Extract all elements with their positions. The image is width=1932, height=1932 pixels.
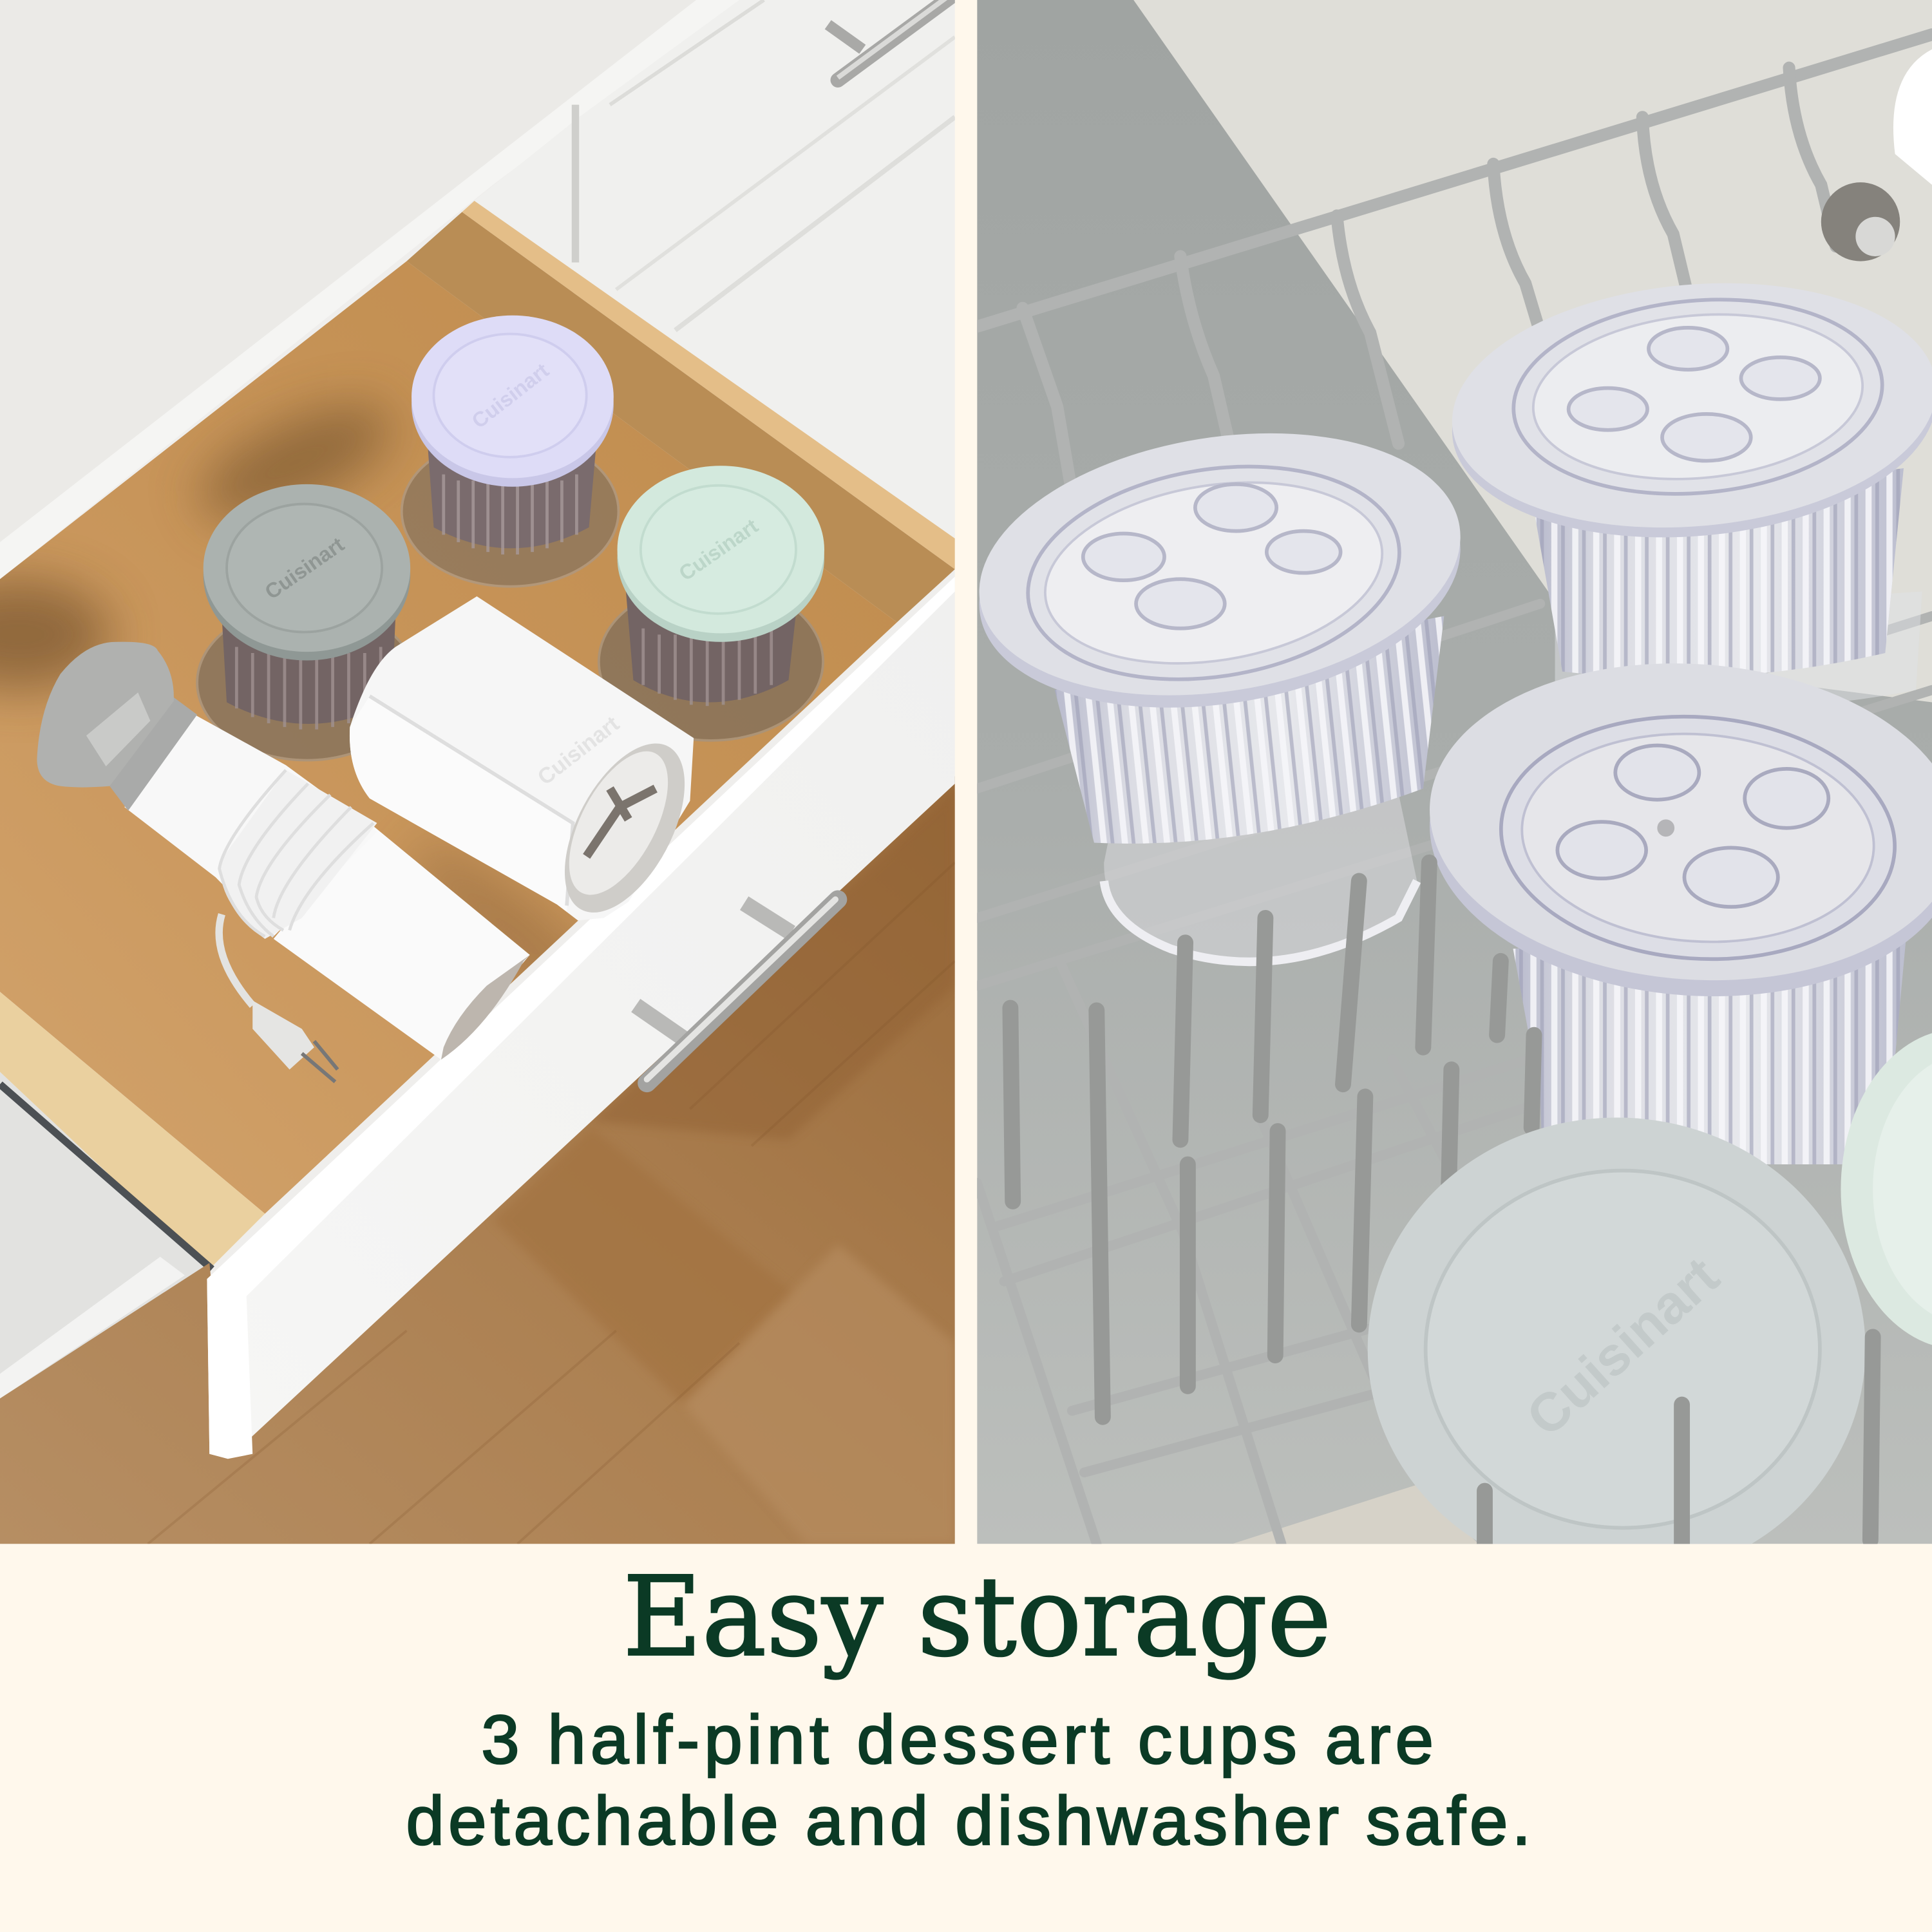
body text: [406, 1701, 1531, 1859]
clear cup front: [1419, 646, 1932, 1164]
front rack pegs: [1010, 862, 1534, 1417]
drawer near side wall: [0, 992, 265, 1269]
gray lid: [1368, 1117, 1866, 1581]
gray cup: Cuisinart: [261, 533, 348, 604]
panel: dishwasher rack photo: [960, 0, 1932, 1581]
clear cup upper right: [1442, 264, 1932, 708]
rack roller: [1821, 182, 1900, 261]
upper sleeve: [124, 715, 377, 936]
body line 2: detachable and dishwasher safe.: [406, 1782, 1531, 1859]
back rack wires: [977, 35, 1932, 493]
lavender cup: Cuisinart: [468, 359, 553, 433]
middle rack wires: [977, 604, 1932, 1544]
upper cabinet doors: [475, 0, 955, 542]
drawer shadows: [0, 382, 643, 1050]
immersion blender with cord: [37, 642, 530, 1082]
lower cabinet and runner: [0, 1072, 212, 1399]
background tub wall: [1133, 0, 1932, 703]
white mug edge: [1893, 50, 1932, 185]
drawer right side wall: [406, 212, 955, 622]
mint lid edge: [1841, 1029, 1932, 1349]
countertop: [0, 0, 696, 542]
wood floor: [0, 776, 955, 1544]
cord coil: [220, 770, 377, 939]
counter edge: [0, 0, 739, 579]
lavender cup: [402, 316, 618, 587]
gray lid: Cuisinart: [1515, 1245, 1730, 1448]
gray cup: [197, 484, 417, 760]
drawer floor: [0, 261, 897, 1214]
panel: drawer storage photo: [0, 0, 955, 1544]
head: [37, 642, 174, 788]
clear foot ring: [1104, 764, 1417, 965]
grey collar: [109, 697, 197, 811]
drawer handle: [636, 900, 838, 1083]
power cord and plug: [219, 914, 252, 1005]
pegs over lid: [1484, 1337, 1873, 1553]
cabinet handle: [828, 0, 955, 80]
wrapped blender cup with blade: [350, 596, 710, 932]
green cup: Cuisinart: [675, 514, 762, 585]
wrapped blender cup with blade: Cuisinart: [533, 712, 624, 790]
drawer front: [207, 576, 955, 1459]
heading: Easy storage: [623, 1554, 1331, 1681]
body line 1: 3 half-pint dessert cups are: [481, 1701, 1434, 1778]
green cup: [599, 466, 824, 741]
lower housing: [274, 823, 530, 1059]
clear cup left: [960, 401, 1479, 965]
